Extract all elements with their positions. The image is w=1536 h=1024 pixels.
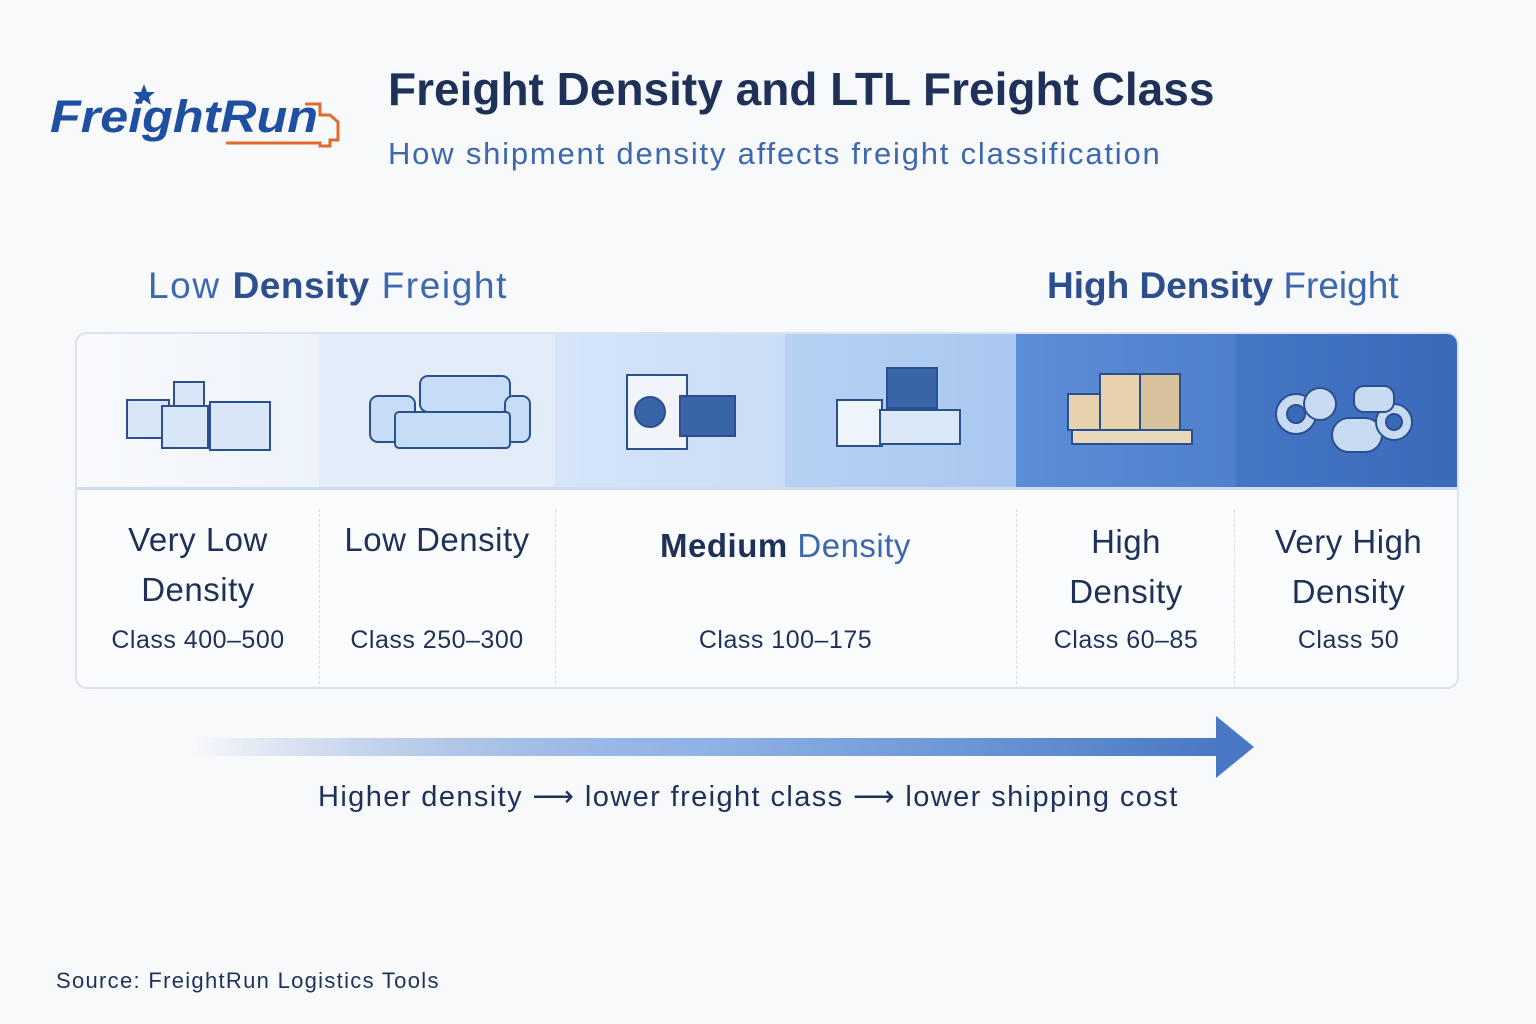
subtitle: How shipment density affects freight classification: [388, 136, 1162, 171]
icon: computer equipment: [836, 367, 961, 447]
heading: high density: High Density Freight: [1047, 265, 1399, 306]
icon: star: [133, 84, 155, 105]
arrow: density gradient: [215, 716, 1254, 778]
panel: density scale: Class 50: [1298, 626, 1399, 654]
panel: density scale: [75, 332, 1459, 689]
source: Source: FreightRun Logistics Tools: [56, 968, 440, 993]
panel: density scale: Density: [1292, 573, 1405, 610]
icon: pallet boxes: [1067, 373, 1193, 445]
panel: density scale: Low Density: [344, 521, 530, 558]
panel: density scale: High: [1091, 523, 1161, 560]
panel: density scale: Medium Density: [660, 527, 911, 564]
caption: Higher density ⟶ lower freight class ⟶ lower shipping cost: [318, 781, 1179, 813]
panel: density scale: Very Low: [128, 521, 268, 558]
logo: FreightRun: [50, 91, 318, 142]
panel: density scale: Class 250–300: [350, 626, 524, 654]
labels: [111, 521, 285, 654]
title: Freight Density and LTL Freight Class: [388, 63, 1214, 115]
panel: density scale: Density: [1069, 573, 1183, 610]
heading: low density: Low Density Freight: [148, 265, 508, 306]
icon: washer and monitor: [626, 374, 736, 450]
icon band: [77, 334, 1461, 490]
icon: truck outline: [226, 104, 338, 146]
panel: density scale: Class 60–85: [1054, 626, 1198, 654]
icon: gears and rolls: [1275, 385, 1413, 453]
panel: density scale: Density: [141, 571, 255, 608]
panel: density scale: Class 100–175: [699, 626, 872, 654]
icon: boxes: [126, 381, 271, 451]
logo: [50, 84, 340, 148]
panel: density scale: Class 400–500: [111, 626, 285, 654]
panel: density scale: Very High: [1275, 523, 1422, 560]
icon: sofa: [369, 375, 531, 449]
